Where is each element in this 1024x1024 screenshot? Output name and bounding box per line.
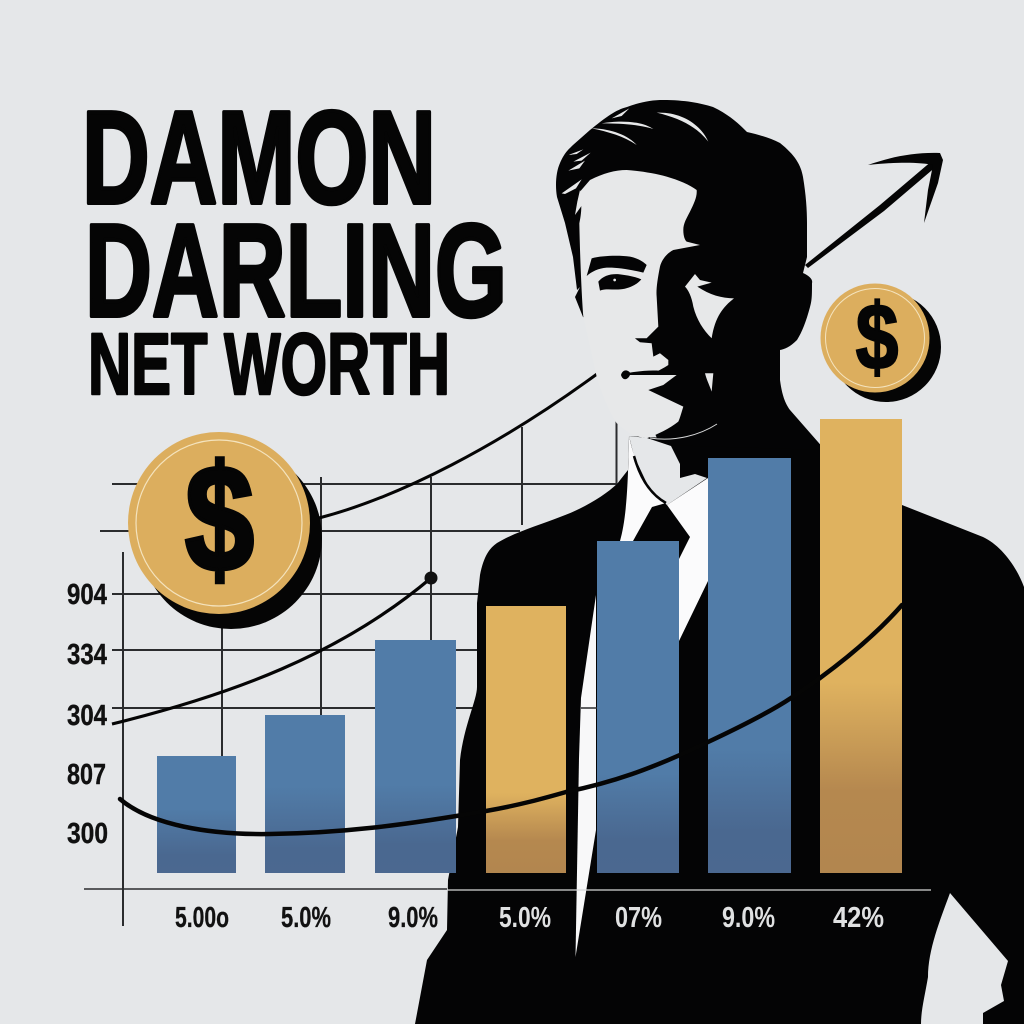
y axis labels: 807 xyxy=(67,759,106,791)
shirt right panel xyxy=(667,478,708,641)
bar 4 xyxy=(486,606,566,873)
jaw rim line xyxy=(650,424,717,439)
y axis labels: 904 xyxy=(67,579,107,611)
small coin xyxy=(820,284,941,402)
x axis labels on light background: 5.00o xyxy=(175,902,229,934)
x axis labels on suit: 9.0% xyxy=(722,902,775,934)
large coin: $ xyxy=(185,434,254,604)
bar 3 xyxy=(375,640,456,873)
y axis labels: 300 xyxy=(67,818,108,850)
x axis labels on light background: 5.0% xyxy=(281,902,331,934)
y axis labels: 304 xyxy=(67,700,107,732)
x axis labels on suit xyxy=(499,902,884,934)
title line: Darling: DARLING xyxy=(85,197,507,344)
lit face xyxy=(579,170,700,438)
person silhouette xyxy=(415,100,1024,1024)
grid line on tie strip xyxy=(581,707,597,709)
title xyxy=(82,84,507,413)
title line: Net Worth: NET WORTH xyxy=(88,316,450,413)
main growth curve xyxy=(120,605,902,834)
left eyebrow xyxy=(587,256,647,276)
bar chart xyxy=(157,419,902,873)
jaw highlight xyxy=(705,373,713,392)
suit and body xyxy=(415,436,1024,1024)
x axis labels on suit: 5.0% xyxy=(499,902,551,934)
hair highlights xyxy=(562,108,708,215)
bar 5 xyxy=(597,541,679,873)
y axis labels: 334 xyxy=(67,639,107,671)
y axis labels xyxy=(67,579,108,850)
shadowed eye highlight xyxy=(685,274,734,338)
x axis labels on light background xyxy=(175,902,438,934)
bar 2 xyxy=(265,715,345,873)
small growth curve with end dot xyxy=(112,572,438,724)
x axis labels on suit: 07% xyxy=(615,902,662,934)
bar 6 xyxy=(708,458,791,873)
tie strip highlight xyxy=(576,595,596,957)
small coin: $ xyxy=(856,285,898,390)
mouth xyxy=(621,370,677,379)
left eye xyxy=(598,274,641,291)
bar 1 xyxy=(157,756,236,873)
x axis xyxy=(84,889,931,890)
collar shadow line xyxy=(634,456,666,503)
bar 7 xyxy=(820,419,902,873)
upper trend line xyxy=(319,374,597,518)
neck and hair silhouette xyxy=(556,100,825,450)
shirt left collar xyxy=(620,436,666,541)
rising arrow xyxy=(805,153,943,268)
chart grid xyxy=(100,417,617,926)
large coin xyxy=(128,432,322,629)
title line: Damon: DAMON xyxy=(82,84,436,231)
x axis labels on suit: 42% xyxy=(833,902,884,934)
neck light area xyxy=(629,436,707,505)
x axis labels on light background: 9.0% xyxy=(388,902,438,934)
